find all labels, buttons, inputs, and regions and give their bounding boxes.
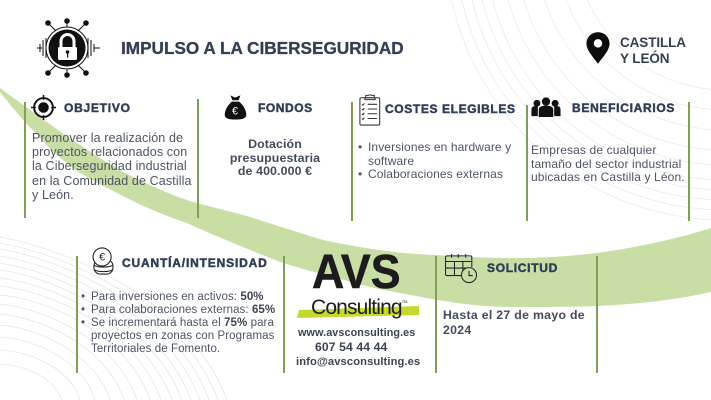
beneficiarios left rule [526, 105, 528, 221]
cuantía right rule [283, 256, 285, 373]
contact details: www.avsconsulting.es [298, 327, 415, 339]
logo AVS: AVS [312, 246, 400, 299]
location label [620, 35, 686, 66]
costes rule [351, 102, 353, 221]
title: IMPULSO A LA CIBERSEGURIDAD [121, 38, 404, 58]
cuantía left rule [76, 256, 78, 373]
contact details: 607 54 44 44 [315, 340, 387, 354]
list: costes: • [358, 140, 362, 154]
panel: cuantía/intensidad [76, 247, 285, 373]
contact details: info@avsconsulting.es [296, 356, 420, 368]
text: objetivo: y León. [32, 188, 74, 202]
panel: objetivo [24, 95, 199, 218]
list: cuantía [81, 291, 275, 355]
list: cuantía: Para inversiones en activos: 50% [91, 291, 264, 303]
objetivo left rule [24, 102, 26, 218]
text: fondos: de 400.000 € [238, 164, 312, 178]
text: fondos [230, 137, 320, 178]
icon: coins: € [99, 252, 105, 264]
text: solicitud [443, 308, 585, 336]
icon: target [31, 95, 56, 120]
heading: fondos: FONDOS [258, 101, 313, 115]
panel: solicitud [435, 254, 598, 373]
icon: checklist [359, 94, 380, 126]
logo underline [297, 306, 419, 318]
icon: money bag: € [232, 106, 238, 118]
text: solicitud: 2024 [443, 322, 472, 336]
text: objetivo [32, 131, 192, 202]
text: solicitud: Hasta el 27 de mayo de [443, 308, 585, 322]
list: cuantía: • [81, 304, 85, 316]
icon: coins [92, 247, 114, 275]
list: cuantía: Para colaboraciones externas: 65% [91, 304, 275, 316]
location label: CASTILLA [620, 35, 686, 50]
beneficiarios right rule [688, 102, 690, 221]
heading: cuantía/intensidad: CUANTÍA/INTENSIDAD [122, 256, 268, 270]
text: beneficiarios: Empresas de cualquier [531, 143, 656, 157]
text: objetivo: en la Comunidad de Castilla [32, 174, 192, 188]
panel: beneficiarios [526, 97, 690, 221]
icon: location pin [586, 32, 610, 64]
icon: money bag [224, 95, 246, 120]
list: cuantía: • [81, 291, 85, 303]
icon: calendar clock [445, 254, 477, 284]
text: objetivo: proyectos relacionados con [32, 145, 187, 159]
panel: costes elegibles [351, 94, 516, 221]
objetivo right rule [197, 99, 199, 218]
text: beneficiarios: tamaño del sector industrial [531, 156, 681, 170]
solicitud right rule [596, 256, 598, 373]
solicitud left rule [435, 256, 437, 373]
text: beneficiarios: ubicadas en Castilla y Léon. [531, 170, 685, 184]
icon: people [531, 97, 561, 117]
text: fondos: Dotación [248, 137, 302, 151]
text: objetivo: la Ciberseguridad industrial [32, 159, 187, 173]
list: cuantía: proyectos en zonas con Programas [91, 330, 274, 342]
contact details [296, 327, 420, 368]
heading: solicitud: SOLICITUD [487, 261, 558, 275]
list: cuantía: Territoriales de Fomento. [91, 343, 220, 355]
list: cuantía: • [81, 317, 85, 329]
list: costes [358, 140, 512, 181]
text: beneficiarios [531, 143, 685, 184]
heading: costes elegibles: COSTES ELEGIBLES [385, 102, 516, 116]
heading: objetivo: OBJETIVO [64, 101, 131, 115]
list: costes: Colaboraciones externas [368, 167, 503, 181]
location label: Y LEÓN [620, 51, 669, 66]
list: costes: Inversiones en hardware y [368, 140, 511, 154]
logo Consulting: ConsultingTM [311, 296, 408, 319]
list: cuantía: Se incrementará hasta el 75% para [91, 317, 274, 329]
list: costes: software [368, 154, 414, 168]
text: fondos: presupuestaria [230, 151, 320, 165]
heading: beneficiarios: BENEFICIARIOS [572, 101, 675, 115]
logo: AVS Consulting [297, 246, 419, 319]
list: costes: • [358, 167, 362, 181]
text: objetivo: Promover la realización de [32, 131, 183, 145]
panel: fondos [224, 95, 320, 178]
icon: padlock circuit [37, 18, 100, 78]
